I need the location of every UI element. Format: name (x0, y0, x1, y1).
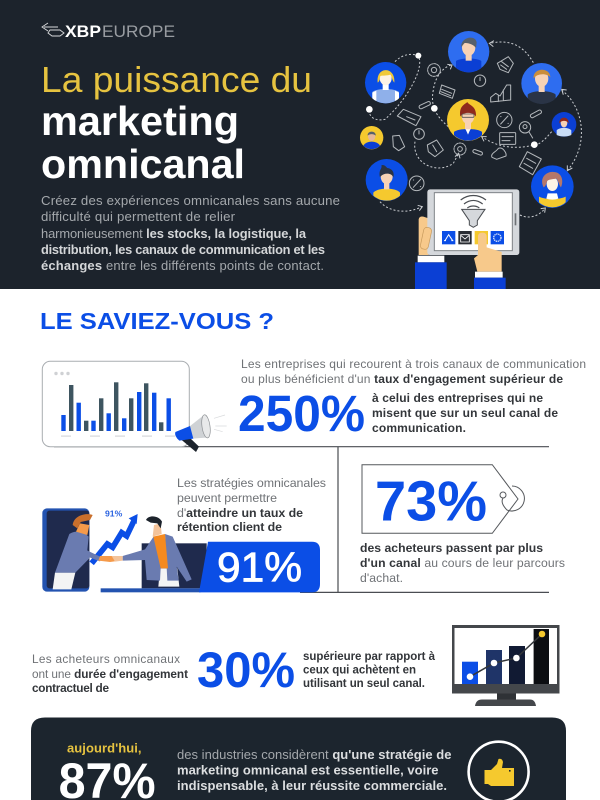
text: d'un canal au cours de leur parcours (360, 556, 565, 570)
icon: megaphone (175, 414, 227, 452)
number box: 91% (217, 544, 302, 591)
left hand (415, 217, 447, 289)
callout text: marketing omnicanal est essentielle, voire (177, 763, 438, 778)
logo: XBP (65, 23, 101, 41)
text (177, 476, 326, 534)
avatar: small left (360, 126, 383, 149)
text: misent que sur un seul canal de (372, 406, 558, 420)
text: ou plus bénéficient d'un taux d'engagement supérieur de (241, 372, 563, 386)
illustration: handshake (42, 508, 207, 592)
text: rétention client de (177, 520, 282, 534)
number: 73% (375, 470, 487, 534)
avatar: lower left (366, 159, 408, 203)
stat block: 250% (42, 357, 586, 452)
icon: thumbs up (469, 742, 529, 800)
logo (42, 23, 175, 41)
text: Les entreprises qui recourent à trois canaux de communication (241, 357, 586, 371)
stat block: 91% (42, 476, 326, 592)
number box (199, 542, 320, 592)
illustration: handshake: 91% (105, 508, 123, 518)
text right: utilisant un seul canal. (303, 678, 425, 690)
avatar: small right (552, 112, 576, 137)
avatar: lower right (531, 165, 574, 210)
intro text: harmonieusement les stocks, la logistique, la (41, 226, 307, 241)
intro text (41, 193, 340, 273)
stat block: 73% (360, 465, 565, 585)
stat block: 30% (32, 625, 560, 706)
text: peuvent permettre (177, 491, 277, 505)
text left: contractuel de (32, 681, 109, 695)
text: d'atteindre un taux de (177, 506, 303, 520)
text (241, 357, 586, 435)
avatar: left (365, 62, 406, 106)
intro text: difficulté qui permettent de relier (41, 209, 236, 224)
text right (303, 651, 436, 690)
icon: monitor chart (452, 625, 560, 706)
text: d'achat. (360, 571, 403, 585)
today label: aujourd'hui, (67, 741, 142, 756)
callout text: indispensable, à leur réussite commerciale. (177, 778, 447, 793)
callout text: des industries considèrent qu'une stratégie de (177, 747, 452, 762)
dashed connectors (366, 41, 581, 217)
number: 250% (238, 385, 365, 442)
text left: ont une durée d'engagement (32, 667, 188, 681)
avatar: top right (521, 63, 562, 107)
intro text: échanges entre les différents points de contact. (41, 258, 324, 273)
text (360, 541, 565, 585)
text right: supérieure par rapport à (303, 651, 436, 663)
intro text: distribution, les canaux de communication et les (41, 242, 325, 257)
tablet (420, 189, 519, 255)
text left (32, 652, 188, 695)
title (41, 59, 312, 187)
title: omnicanal (41, 141, 245, 187)
title: marketing (41, 98, 239, 144)
title: La puissance du (41, 59, 312, 100)
text: communication. (372, 421, 466, 435)
text: à celui des entreprises qui ne (372, 391, 543, 405)
panel: header (0, 0, 600, 289)
text: Les stratégies omnicanales (177, 476, 326, 490)
illustration: omnichannel network (360, 31, 581, 289)
text right: ceux qui achètent en (303, 664, 416, 676)
callout text (177, 747, 452, 793)
avatar: top (448, 31, 489, 75)
logo: EUROPE (102, 23, 175, 41)
outline icons (393, 57, 542, 191)
text left: Les acheteurs omnicanaux (32, 652, 180, 666)
right hand (474, 233, 506, 289)
text: des acheteurs passent par plus (360, 541, 543, 555)
intro text: Créez des expériences omnicanales sans aucune (41, 193, 340, 208)
number: 30% (197, 642, 295, 698)
avatar: center (447, 99, 489, 143)
heading: le saviez-vous: LE SAVIEZ-VOUS ? (40, 308, 274, 334)
chart card (42, 361, 189, 447)
panel: 87% callout (31, 718, 566, 800)
price tag (362, 465, 524, 533)
rules (54, 447, 549, 592)
